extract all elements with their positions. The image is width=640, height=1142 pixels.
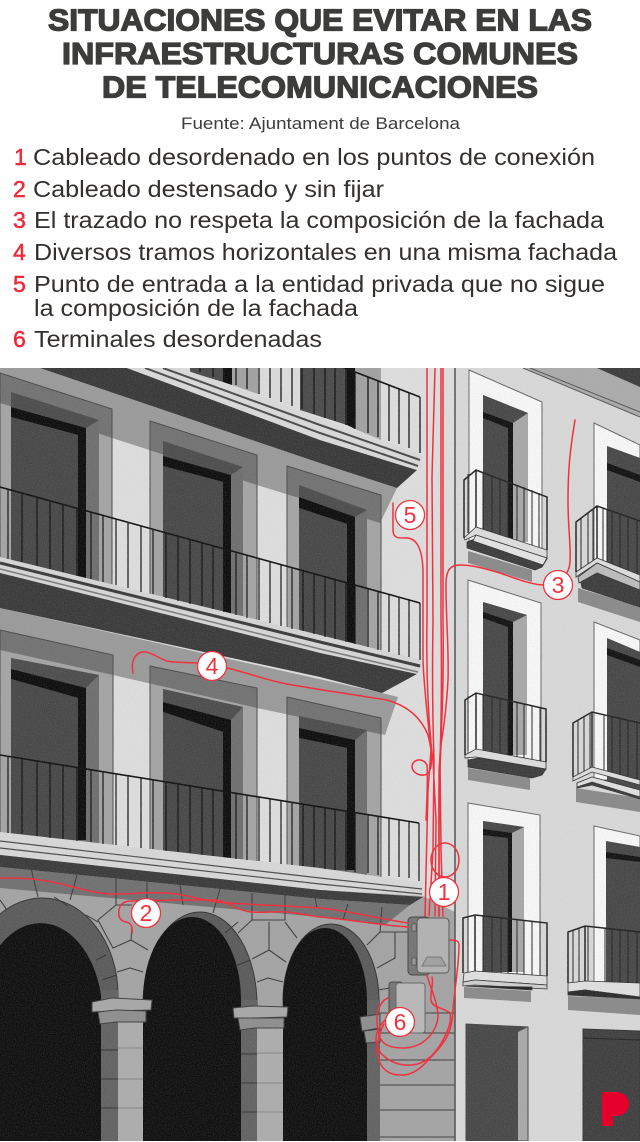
paper grain overlay: [0, 368, 640, 1141]
cable 5: [393, 503, 431, 916]
arch 1: [0, 897, 118, 1141]
corner line between buildings: [454, 368, 456, 1141]
cable 1 loop: [431, 843, 459, 877]
marker 1: 1: [438, 879, 450, 905]
arch 3: [283, 924, 380, 1141]
red cables: [0, 368, 575, 1075]
item 5: la composición de la fachada: [34, 295, 358, 321]
arch 2: [143, 912, 257, 1141]
logo: red P: [602, 1092, 629, 1126]
lower balcony railing and slab: [0, 755, 423, 896]
ground floor doors right: [466, 1024, 640, 1141]
right balcony railings: [463, 470, 640, 983]
title: INFRAESTRUCTURAS COMUNES: [62, 37, 578, 71]
pier capitals: [92, 998, 380, 1043]
ground floor stonework: [0, 855, 455, 1141]
title: DE TELECOMUNICACIONES: [102, 70, 538, 104]
item 2: Cableado destensado y sin fijar: [33, 176, 384, 202]
title: SITUACIONES QUE EVITAR EN LAS: [48, 4, 592, 38]
marker 5: [396, 500, 424, 530]
item 6: Terminales desordenadas: [34, 326, 322, 352]
left building windows upper row: [0, 373, 381, 660]
vertical bundle: [427, 368, 443, 916]
item 4: Diversos tramos horizontales en una misma fachada: [34, 239, 617, 265]
right building wall: [455, 368, 640, 1141]
marker 3: 3: [552, 572, 564, 598]
top balcony: [40, 358, 422, 488]
telecom box 2: [389, 982, 425, 1033]
marker 3: [544, 570, 572, 600]
numbered markers: [132, 500, 572, 1036]
right building window frames: [468, 370, 640, 985]
item 1: 1: [14, 144, 27, 170]
left building windows lower row: [0, 630, 381, 890]
marker 2: [132, 898, 160, 928]
marker 6: 6: [394, 1009, 406, 1035]
illustration: building facade: [0, 358, 640, 1141]
item 3: El trazado no respeta la composición de la fachada: [34, 207, 604, 233]
item 5: Punto de entrada a la entidad privada que no sigue: [34, 271, 605, 297]
balcony shadows on right wall: [464, 551, 640, 1015]
cable 4: [132, 652, 432, 820]
item 4: 4: [13, 239, 26, 265]
telecom box 1: [408, 917, 449, 975]
upper balcony railing and slab: [0, 487, 421, 693]
marker 2: 2: [140, 900, 152, 926]
item 2: 2: [13, 176, 26, 202]
item 5: [13, 271, 605, 321]
marker 5: 5: [404, 502, 416, 528]
cable 6 tangle: [377, 940, 459, 1075]
cable 2: [0, 878, 408, 923]
item 1: Cableado desordenado en los puntos de conexión: [33, 144, 595, 170]
cable 3: [439, 420, 575, 916]
marker 4: [198, 652, 226, 680]
right building window openings: [483, 395, 640, 990]
numbered list of situations: [13, 144, 617, 352]
item 6: 6: [13, 326, 26, 352]
right balcony slabs: [463, 527, 640, 999]
marker 1: [430, 878, 458, 906]
item 5: 5: [13, 271, 26, 297]
marker 6: [386, 1008, 414, 1036]
source line: Fuente: Ajuntament de Barcelona: [181, 115, 461, 133]
title: [48, 4, 592, 104]
right building cornice: [523, 368, 640, 417]
cast shadows on left wall: [0, 368, 398, 735]
item 3: 3: [13, 207, 26, 233]
left building wall: [0, 368, 454, 912]
marker 4: 4: [206, 653, 219, 679]
